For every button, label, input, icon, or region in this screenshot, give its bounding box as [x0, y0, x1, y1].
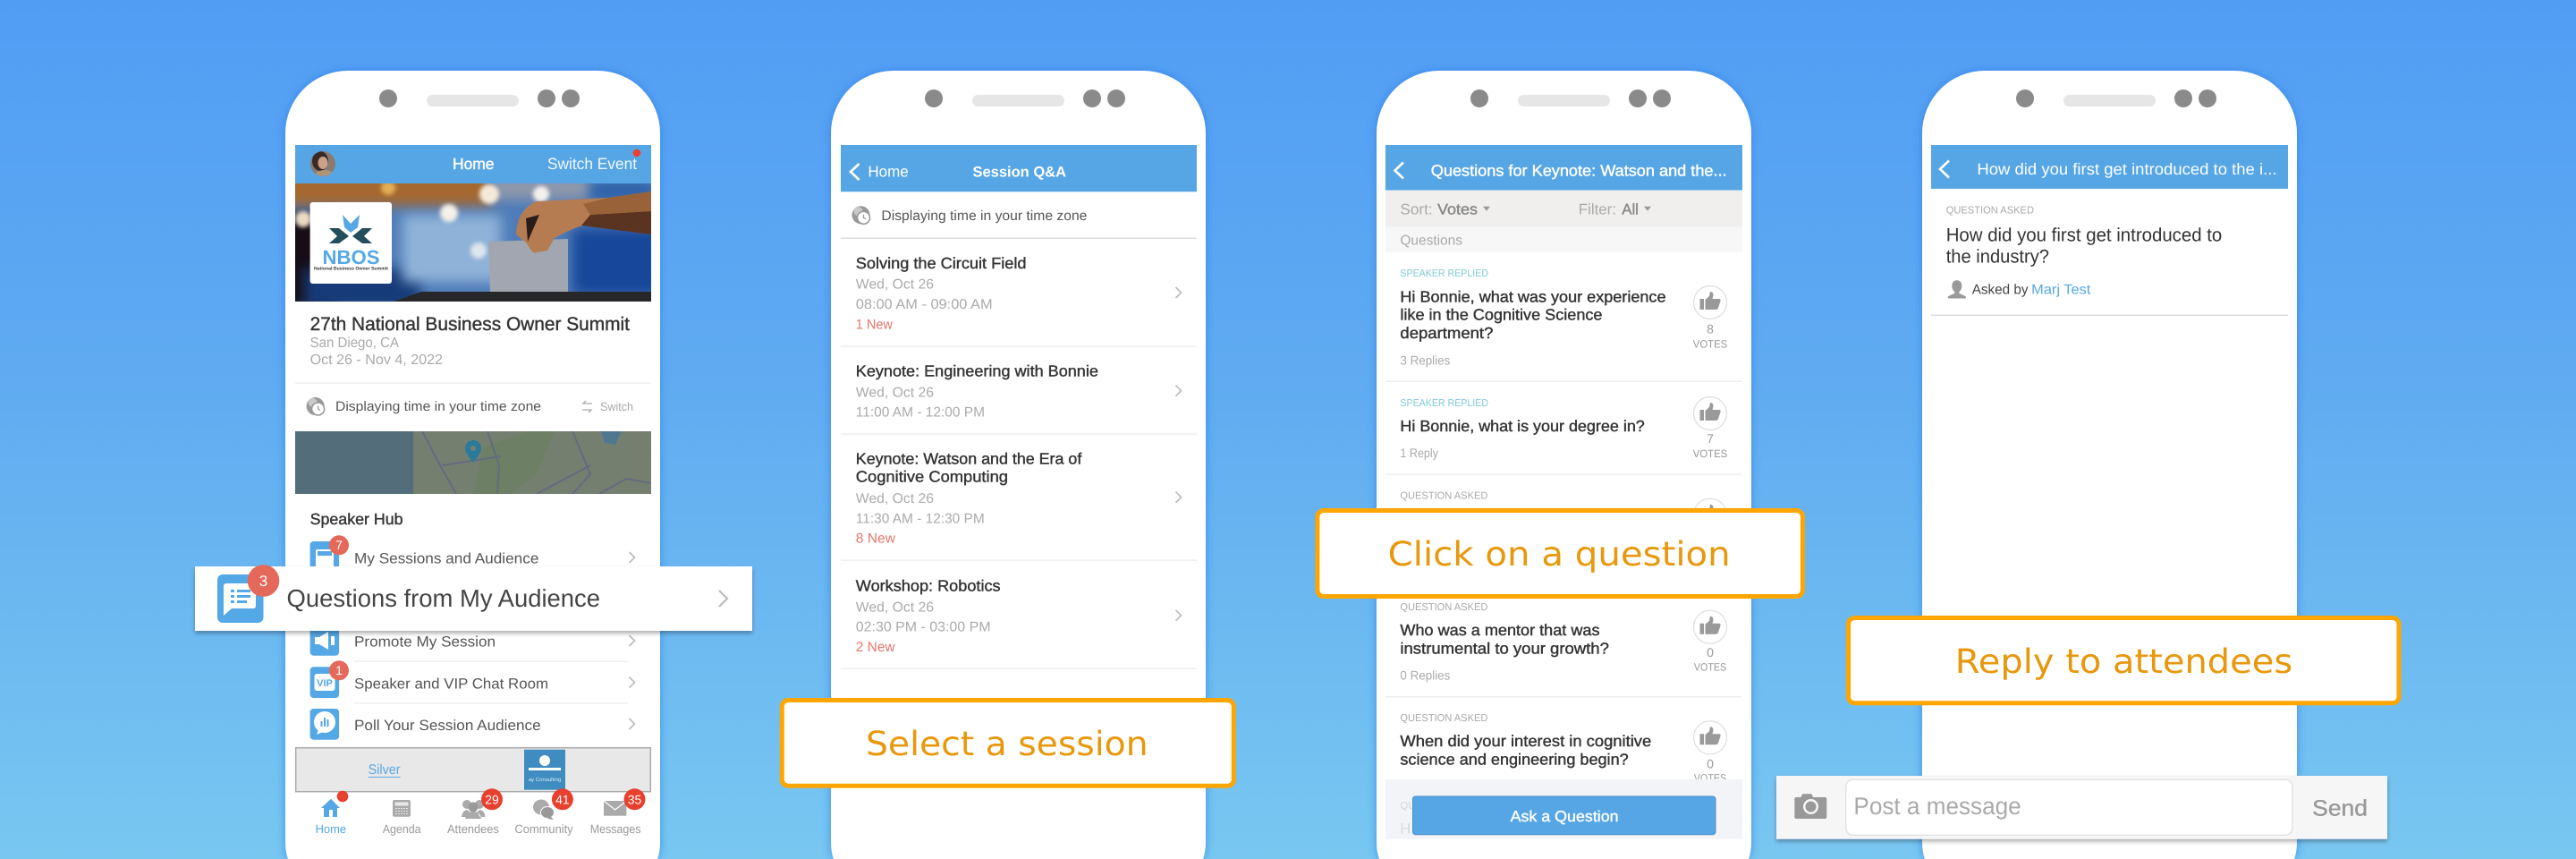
question: mentor: Who was a mentor that was	[1400, 621, 1600, 639]
tab: Home: Home	[316, 822, 346, 836]
panel: phone 1 home screen	[268, 71, 662, 859]
header bar: Session Q&A: Session Q&A	[973, 165, 1066, 181]
sort and filter bar: Votes	[1437, 201, 1478, 218]
session: Keynote Watson: 8 New	[856, 532, 896, 547]
question detail: Marj Test	[2031, 283, 2091, 298]
question detail	[1946, 205, 2222, 299]
tab: Agenda	[383, 800, 421, 836]
session: Workshop Robotics	[856, 576, 1181, 655]
time zone row	[307, 397, 633, 415]
footer with Ask a Question button: H	[1400, 821, 1411, 838]
session: Keynote Watson: 11:30 AM - 12:30 PM	[856, 511, 985, 526]
question: Cognitive Science department: SPEAKER REPLIED	[1400, 268, 1488, 279]
sort and filter bar: Filter:	[1579, 201, 1616, 218]
session: Keynote Engineering with Bonnie: 11:00 AM - 12:00 PM	[856, 404, 985, 420]
tab: Attendees: Attendees	[447, 822, 499, 836]
session: Keynote Engineering with Bonnie	[856, 361, 1181, 420]
question: Cognitive Science department: department?	[1400, 324, 1494, 342]
event title and details: Oct 26 - Nov 4, 2022	[310, 353, 443, 368]
session: Keynote Watson	[856, 450, 1181, 547]
header bar: Session Q&A: Home	[868, 163, 909, 181]
header bar: questions title	[1385, 145, 1742, 191]
question: degree: 1 Reply	[1400, 446, 1438, 460]
message input bar: Post a message	[1853, 793, 2021, 820]
NBOS logo card	[310, 202, 392, 284]
question: degree	[1400, 397, 1727, 460]
callout banner: Questions from My Audience: 3	[259, 573, 267, 590]
header bar: questions title: Questions for Keynote: Watson and the...	[1431, 161, 1727, 179]
message input bar	[1776, 776, 2387, 839]
tab: Community: Community	[515, 822, 573, 836]
event title and details: 27th National Business Owner Summit	[310, 314, 630, 335]
question: cognitive science interest: VOTES	[1694, 771, 1726, 784]
NBOS logo card: National Business Owner Summit	[314, 267, 388, 272]
speaker hub list	[310, 510, 635, 740]
session: Keynote Watson: Cognitive Computing	[856, 468, 1008, 486]
header bar: Session Q&A	[841, 145, 1197, 191]
question detail: Asked by	[1972, 283, 2029, 298]
session: Solving the Circuit Field: Wed, Oct 26	[856, 277, 934, 293]
session: Solving the Circuit Field: 1 New	[856, 317, 894, 332]
icon: promote megaphone	[310, 625, 339, 656]
phone frame 2	[831, 71, 1206, 859]
header bar: question title	[1931, 145, 2288, 189]
question: mentor: QUESTION ASKED	[1400, 602, 1487, 613]
questions heading	[1385, 227, 1742, 252]
bottom tab bar	[316, 788, 646, 836]
tab: Attendees: 29	[485, 792, 499, 806]
panel: phone 4 question detail	[1922, 71, 2297, 859]
question: mentor: instrumental to your growth?	[1400, 639, 1609, 657]
icon: VIP chat: 1	[335, 663, 343, 677]
tab: Messages: 35	[628, 792, 641, 806]
question: mentor: 0 Replies	[1400, 668, 1450, 682]
question: cognitive science interest: science and engineering begin?	[1400, 750, 1629, 768]
speaker hub list: My Sessions and Audience	[354, 550, 538, 566]
tab: Messages	[590, 788, 646, 836]
question: degree: Hi Bonnie, what is your degree in?	[1400, 417, 1645, 435]
icon: poll	[310, 709, 339, 740]
question: cognitive science interest	[1400, 713, 1726, 784]
question: degree: 7	[1707, 431, 1714, 446]
tab: Attendees	[447, 788, 503, 836]
icon: my sessions calendar	[310, 535, 349, 573]
footer with Ask a Question button	[1385, 779, 1742, 839]
tab: Home	[316, 791, 348, 836]
callout: Click on a question	[1318, 510, 1802, 596]
phone frame 4	[1922, 71, 2297, 859]
callout: Reply to attendees	[1848, 617, 2399, 703]
question: mentor: VOTES	[1694, 660, 1726, 673]
session: Workshop Robotics: Workshop: Robotics	[856, 576, 1001, 594]
session: Keynote Engineering with Bonnie: Wed, Oct 26	[856, 385, 934, 400]
question: partly covered	[1400, 491, 1726, 532]
panel: phone 3 questions list	[1377, 71, 1751, 859]
icon: person	[1948, 280, 1966, 299]
session: Workshop Robotics: 02:30 PM - 03:00 PM	[856, 620, 991, 635]
question: cognitive science interest: QUESTION ASKED	[1400, 713, 1487, 724]
session: Keynote Watson: Wed, Oct 26	[856, 491, 934, 506]
icon: VIP chat: VIP	[317, 678, 333, 689]
session: Solving the Circuit Field: 08:00 AM - 09:00 AM	[856, 297, 993, 312]
question: partly covered: QUESTION ASKED	[1400, 491, 1487, 502]
event title and details: San Diego, CA	[310, 336, 399, 351]
speaker hub list: Poll Your Session Audience	[354, 718, 541, 734]
session: Solving the Circuit Field	[856, 254, 1181, 332]
question: Cognitive Science department: like in the Cognitive Science	[1400, 306, 1603, 324]
question detail: the industry?	[1946, 246, 2049, 267]
question: Cognitive Science department	[1400, 268, 1727, 367]
tab: Agenda: Agenda	[383, 822, 421, 836]
question: mentor	[1400, 602, 1726, 682]
header bar: Home: Home	[453, 155, 494, 173]
callout: Reply to attendees: Reply to attendees	[1955, 642, 2292, 681]
icon: my sessions calendar: 7	[335, 538, 343, 552]
header bar: Home	[295, 145, 651, 183]
time zone row: Displaying time in your time zone	[335, 399, 541, 414]
phone frame 3	[1377, 71, 1751, 859]
footer with Ask a Question button: Ask a Question	[1511, 808, 1619, 825]
questions heading: Questions	[1400, 233, 1462, 248]
sort and filter bar: Sort:	[1400, 201, 1433, 218]
phone frame 1	[285, 71, 660, 859]
tab: Messages: Messages	[590, 822, 641, 836]
callout banner: Questions from My Audience	[195, 565, 752, 631]
question detail: QUESTION ASKED	[1946, 205, 2034, 216]
sponsor banner	[296, 748, 650, 792]
sort and filter bar: All	[1622, 201, 1639, 218]
question detail: How did you first get introduced to	[1946, 225, 2222, 245]
sort and filter bar	[1385, 191, 1742, 227]
icon: VIP chat	[310, 660, 349, 698]
callout: Click on a question: Click on a question	[1388, 534, 1731, 574]
session: Workshop Robotics: Wed, Oct 26	[856, 600, 934, 615]
hero photo with hand and ballot	[295, 183, 651, 302]
question: degree: VOTES	[1693, 447, 1727, 460]
session: Solving the Circuit Field: Solving the Circuit Field	[856, 254, 1027, 272]
tab: Community: 41	[555, 792, 570, 806]
message input bar: Send	[2312, 796, 2368, 821]
event title and details	[310, 314, 630, 368]
question: mentor: 0	[1707, 645, 1714, 659]
speaker hub list: Speaker Hub	[310, 510, 403, 528]
speaker hub list: Speaker and VIP Chat Room	[354, 676, 548, 692]
question: Cognitive Science department: Hi Bonnie, what was your experience	[1400, 287, 1665, 305]
callout: Select a session: Select a session	[866, 724, 1148, 763]
question: cognitive science interest: 0	[1707, 756, 1714, 770]
question: Cognitive Science department: 8	[1707, 322, 1714, 336]
session: Keynote Engineering with Bonnie: Keynote: Engineering with Bonnie	[856, 361, 1098, 379]
session: Workshop Robotics: 2 New	[856, 640, 895, 655]
footer with Ask a Question button: QU	[1400, 801, 1416, 812]
question: degree: SPEAKER REPLIED	[1400, 398, 1488, 409]
NBOS logo card: NBOS	[322, 246, 379, 268]
callout banner: Questions from My Audience: Questions from My Audience	[286, 584, 600, 612]
sponsor banner: ay Consulting	[529, 777, 561, 783]
time zone row: Switch	[600, 400, 633, 413]
panel: phone 2 session list	[831, 71, 1206, 859]
map	[295, 431, 651, 494]
speaker hub list: Promote My Session	[354, 634, 496, 651]
session: Keynote Watson: Keynote: Watson and the Era of	[856, 450, 1081, 468]
question: Cognitive Science department: VOTES	[1693, 338, 1727, 351]
question: Cognitive Science department: 3 Replies	[1400, 353, 1450, 367]
tab: Community	[515, 788, 573, 836]
time zone row: Displaying time in your time zone	[881, 208, 1087, 224]
callout: Select a session	[782, 700, 1233, 786]
icon: camera	[1794, 794, 1826, 819]
sponsor banner: Silver	[369, 762, 401, 778]
header bar: question title: How did you first get introduced to the i...	[1977, 160, 2277, 178]
question: cognitive science interest: When did your interest in cognitive	[1400, 732, 1651, 750]
header bar: Home: Switch Event	[547, 155, 637, 173]
